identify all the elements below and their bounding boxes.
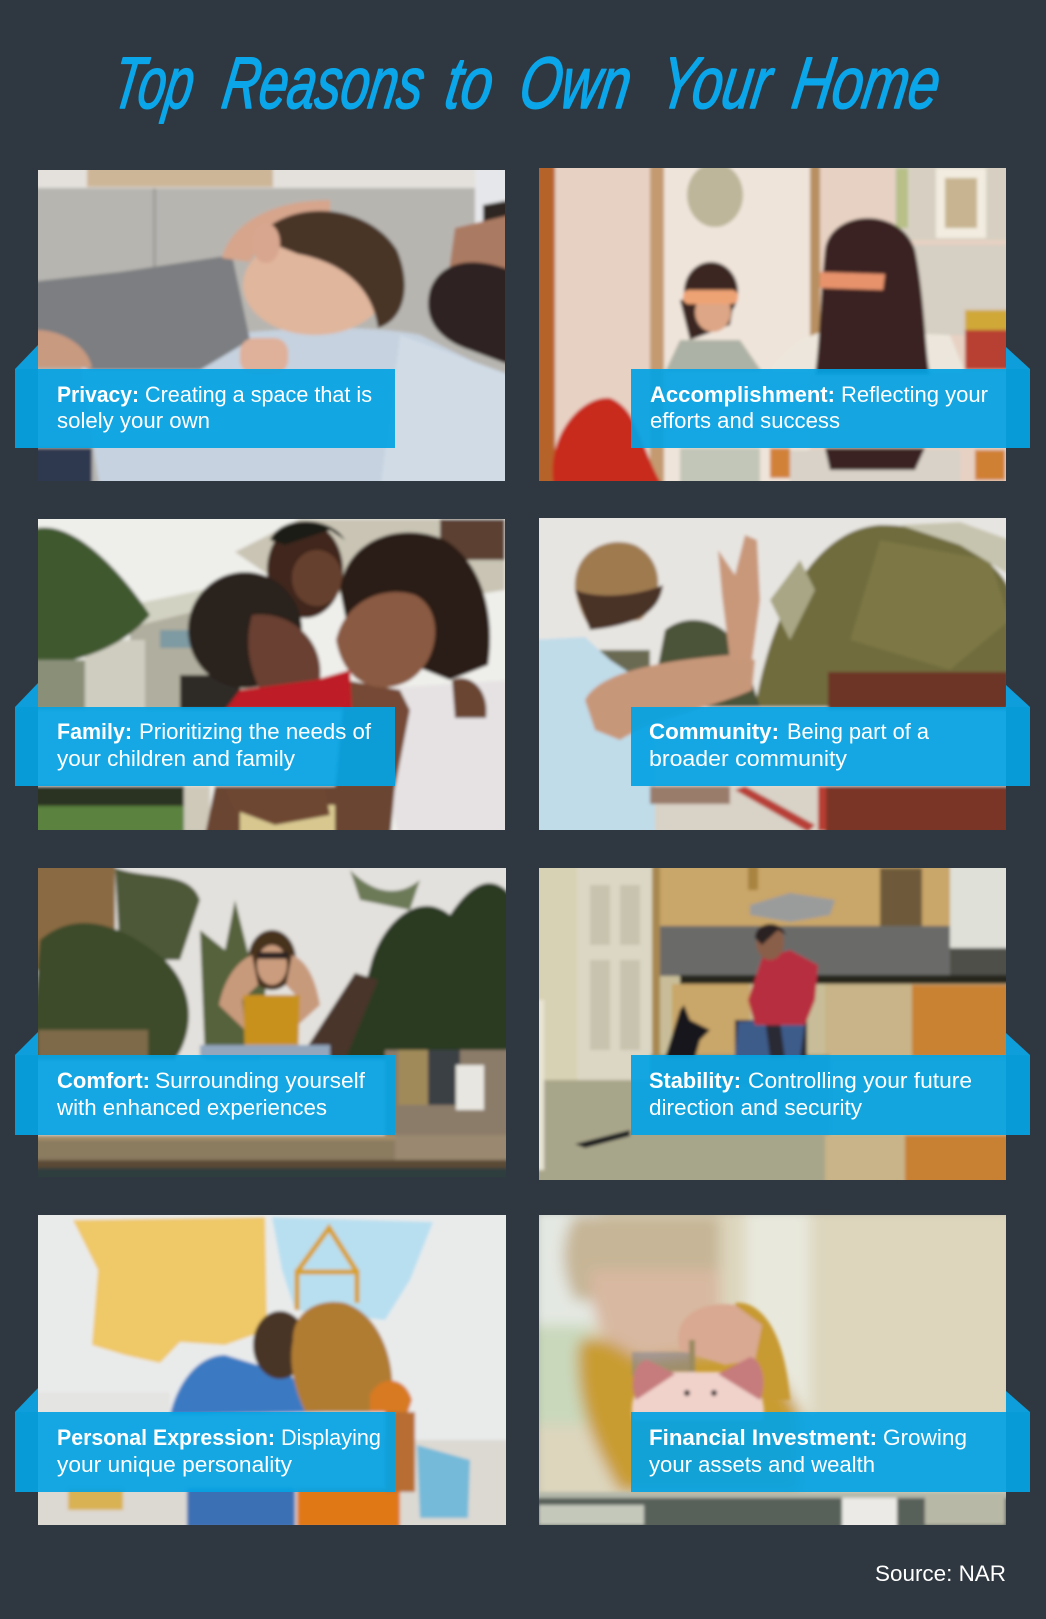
photo: couple looking at painted wall [38, 1215, 506, 1525]
banner: comfort: Comfort: [57, 1068, 150, 1093]
banner: comfort [15, 1032, 395, 1135]
photo: man in wheelchair in kitchen with dog [530, 860, 1020, 1190]
panel: accomplishment [530, 160, 1030, 490]
banner: family: Family: [57, 719, 132, 744]
banner: privacy: Creating a space that is [145, 382, 372, 407]
photo: child with piggy bank [539, 1215, 1006, 1525]
panel: personal expression [15, 1205, 520, 1535]
banner: stability: direction and security [649, 1095, 863, 1120]
banner: personal expression [15, 1388, 395, 1492]
banner: privacy: solely your own [57, 408, 210, 433]
banner: stability: Stability: [649, 1068, 741, 1093]
banner: stability: Controlling your future [748, 1068, 972, 1093]
panel: comfort [15, 868, 506, 1170]
panel: privacy [15, 160, 520, 490]
photo: father and son sleeping on a sofa [38, 170, 505, 481]
title: to [440, 42, 499, 124]
banner: financial investment [631, 1391, 1030, 1492]
banner: community: broader community [649, 746, 848, 771]
banner: personal expression: your unique personality [57, 1452, 293, 1477]
banner: accomplishment [631, 347, 1030, 448]
banner: accomplishment: efforts and success [650, 408, 840, 433]
banner: financial investment: Growing [883, 1425, 967, 1450]
banner: community [631, 685, 1030, 786]
panel: financial investment [530, 1205, 1030, 1535]
title: Own [514, 42, 637, 124]
banner: community: Being part of a [787, 719, 929, 744]
banner: accomplishment: Reflecting your [841, 382, 988, 407]
title: Top [107, 42, 200, 124]
banner: stability [631, 1033, 1030, 1135]
title: Reasons [217, 42, 430, 124]
banner: comfort: Surrounding yourself [155, 1068, 366, 1093]
photo: mother hugging two children [38, 519, 505, 830]
panel: family [15, 510, 520, 840]
banner: family: your children and family [57, 746, 296, 771]
title [107, 42, 946, 124]
banner: community: Community: [649, 719, 779, 744]
title: Your [654, 42, 779, 124]
panel: community [530, 510, 1030, 840]
banner: comfort: with enhanced experiences [56, 1095, 327, 1120]
photo: woman with headphones among plants [38, 868, 506, 1170]
banner: family [15, 683, 395, 786]
banner: privacy [15, 345, 395, 448]
banner: accomplishment: Accomplishment: [650, 382, 835, 407]
banner: financial investment: Financial Investment: [649, 1425, 877, 1450]
banner: personal expression: Displaying [281, 1425, 381, 1450]
panel: stability [530, 860, 1030, 1190]
banner: family: Prioritizing the needs of [139, 719, 372, 744]
photo: woman waving to a neighbour [530, 510, 1020, 840]
source note: Source: NAR [875, 1561, 1006, 1586]
photo: children in masks playing [530, 160, 1020, 490]
banner: privacy: Privacy: [57, 382, 139, 407]
banner: personal expression: Personal Expression: [57, 1425, 275, 1450]
title: Home [787, 42, 946, 124]
banner: financial investment: your assets and wealth [649, 1452, 875, 1477]
